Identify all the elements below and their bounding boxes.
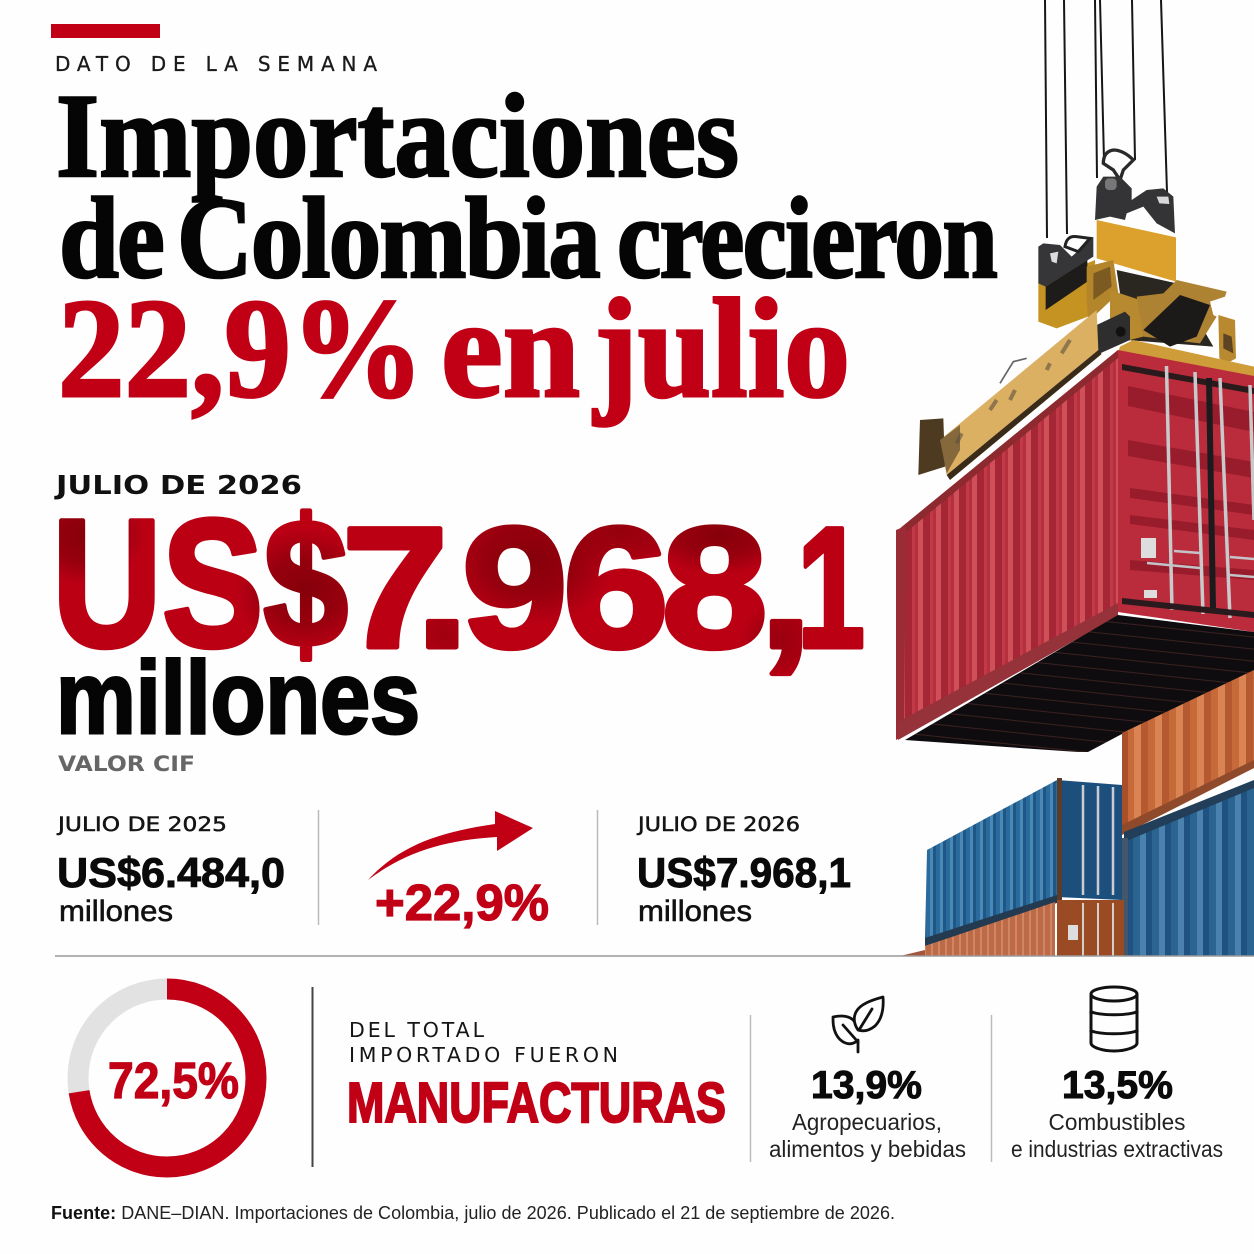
- stat: July 2026: [636, 813, 851, 928]
- main figure unit: millones: [56, 640, 420, 755]
- manufactures block: IMPORTADO FUERON: [349, 1043, 618, 1067]
- category: fuels: Combustibles: [1048, 1109, 1186, 1135]
- kicker: DATO DE LA SEMANA: [55, 52, 377, 76]
- category: fuels: e industrias extractivas: [1011, 1136, 1223, 1162]
- source: Fuente: DANE–DIAN. Importaciones de Colombia, julio de 2026. Publicado el 21 de septiembre de 2026.: [51, 1203, 895, 1223]
- donut chart: 72,5%: [108, 1052, 239, 1109]
- stat: July 2025: JULIO DE 2025: [56, 813, 227, 836]
- title line 2: [59, 175, 996, 303]
- title line 3: julio: [592, 269, 850, 427]
- blue container left: [925, 778, 1122, 946]
- red container: [896, 350, 1254, 752]
- title line 2: de: [59, 175, 163, 303]
- main figure: [52, 481, 865, 685]
- stat: July 2026: JULIO DE 2026: [636, 813, 800, 836]
- stat: July 2025: millones: [59, 895, 173, 928]
- title line 2: crecieron: [617, 175, 996, 303]
- category: agriculture: Agropecuarios,: [792, 1109, 942, 1135]
- icon: leaves: [833, 997, 883, 1052]
- title line 3: 22,9%: [58, 269, 424, 427]
- yellow beam on container: [918, 310, 1254, 480]
- title: [56, 69, 996, 427]
- title line 1: Importaciones: [56, 69, 739, 202]
- title line 3: en: [441, 269, 580, 427]
- category: agriculture: alimentos y bebidas: [769, 1136, 966, 1162]
- manufactures block: DEL TOTAL: [349, 1018, 485, 1042]
- value note: VALOR CIF: [58, 752, 195, 776]
- date label: JULIO DE 2026: [54, 471, 302, 501]
- donut chart: [78, 989, 256, 1167]
- category: agriculture: 13,9%: [811, 1064, 922, 1107]
- stat: July 2026: millones: [638, 895, 752, 928]
- manufactures block: MANUFACTURAS: [347, 1071, 726, 1135]
- crane cables: [1045, 0, 1167, 238]
- growth value: +22,9%: [375, 874, 549, 931]
- title line 2: Colombia: [177, 175, 600, 303]
- category: fuels: 13,5%: [1062, 1064, 1173, 1107]
- manufactures block: [347, 1018, 726, 1135]
- orange container right: [1122, 670, 1254, 835]
- title line 3: [58, 269, 850, 427]
- orange container lower left: [900, 900, 1124, 956]
- main figure: US$: [52, 481, 348, 685]
- category: agriculture: [769, 997, 966, 1162]
- blue container right: [1122, 780, 1254, 956]
- arrow: [368, 811, 533, 880]
- stat: July 2025: [56, 813, 285, 928]
- stat: July 2026: US$7.968,1: [637, 849, 851, 896]
- stat: July 2025: US$6.484,0: [57, 849, 285, 896]
- accent bar: [51, 24, 160, 38]
- photo: containers and crane: [896, 0, 1254, 956]
- crane spreader: [1038, 150, 1236, 363]
- main figure: 1: [797, 492, 865, 684]
- main figure: 7.968,: [342, 492, 812, 684]
- icon: barrel: [1090, 987, 1138, 1051]
- category: fuels: [1011, 987, 1223, 1162]
- comparison row: [56, 810, 851, 931]
